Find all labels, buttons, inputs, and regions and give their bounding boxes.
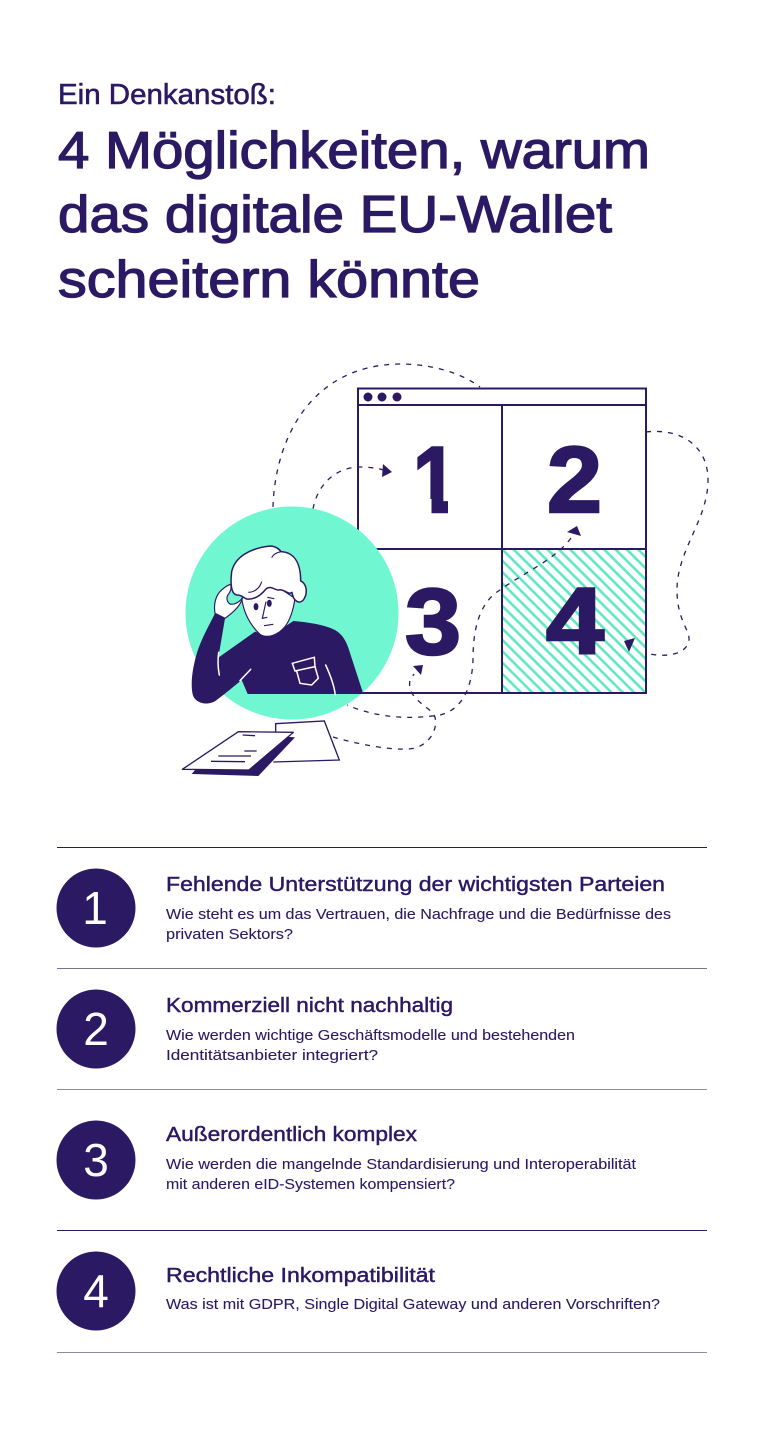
number badge 4: 4	[83, 1265, 109, 1317]
item 3 text: Wie werden die mangelnde Standardisierung und Interoperabilität	[166, 1157, 636, 1173]
item 3 text: mit anderen eID-Systemen kompensiert?	[166, 1177, 455, 1193]
title	[58, 122, 650, 309]
face features	[254, 597, 274, 626]
list dividers	[57, 847, 707, 1353]
item 3 heading: Außerordentlich komplex	[166, 1124, 417, 1146]
number badge 3	[56, 1120, 136, 1200]
hand	[215, 584, 242, 618]
item 1 text: Wie steht es um das Vertrauen, die Nachfrage und die Bedürfnisse des	[166, 907, 671, 923]
number badge 3: 3	[83, 1134, 109, 1186]
panel numbers	[406, 445, 605, 656]
browser window with four panels	[358, 388, 646, 693]
item 1	[56, 868, 671, 948]
item 3 text	[166, 1157, 636, 1193]
number badge 2: 2	[83, 1003, 109, 1055]
window dots	[364, 392, 402, 402]
item 4	[56, 1252, 660, 1330]
hair	[231, 546, 306, 602]
dashed arrows over the window	[313, 467, 571, 749]
item 4 heading: Rechtliche Inkompatibilität	[166, 1265, 436, 1287]
title: das digitale EU-Wallet	[58, 186, 613, 244]
panel numbers: 4	[546, 568, 604, 673]
papers	[182, 721, 339, 776]
item 1 text: privaten Sektors?	[166, 927, 293, 943]
panel numbers: 1	[413, 427, 457, 532]
arrowheads	[382, 464, 635, 675]
item 2 text	[166, 1028, 575, 1064]
person, drawn in 3x coordinates	[192, 546, 363, 704]
title: scheitern könnte	[58, 251, 480, 309]
item 3	[56, 1120, 636, 1200]
number badge 4	[56, 1252, 136, 1330]
panel numbers: 2	[547, 427, 602, 532]
item 1 heading: Fehlende Unterstützung der wichtigsten Parteien	[166, 874, 665, 896]
item 2 text: Identitätsanbieter integriert?	[166, 1048, 378, 1064]
item 2	[56, 990, 575, 1068]
item 2 heading: Kommerziell nicht nachhaltig	[166, 995, 453, 1017]
eyebrow heading: Ein Denkanstoß:	[58, 79, 276, 111]
illustration	[182, 364, 708, 776]
dashed arrow paths behind the window	[273, 364, 708, 655]
sleeve and pocket lines	[218, 652, 335, 695]
title: 4 Möglichkeiten, warum	[58, 122, 650, 180]
teal circle	[186, 506, 398, 720]
item 2 text: Wie werden wichtige Geschäftsmodelle und bestehenden	[166, 1028, 575, 1044]
number badge 1: 1	[82, 882, 108, 934]
face	[242, 582, 295, 636]
panel numbers: 3	[405, 569, 461, 674]
number badge 1	[56, 868, 136, 948]
item 1 text	[166, 907, 671, 943]
item 4 text: Was ist mit GDPR, Single Digital Gateway und anderen Vorschriften?	[166, 1297, 660, 1313]
number badge 2	[56, 990, 136, 1068]
panel 4 hatch	[502, 549, 646, 693]
body	[192, 613, 363, 704]
